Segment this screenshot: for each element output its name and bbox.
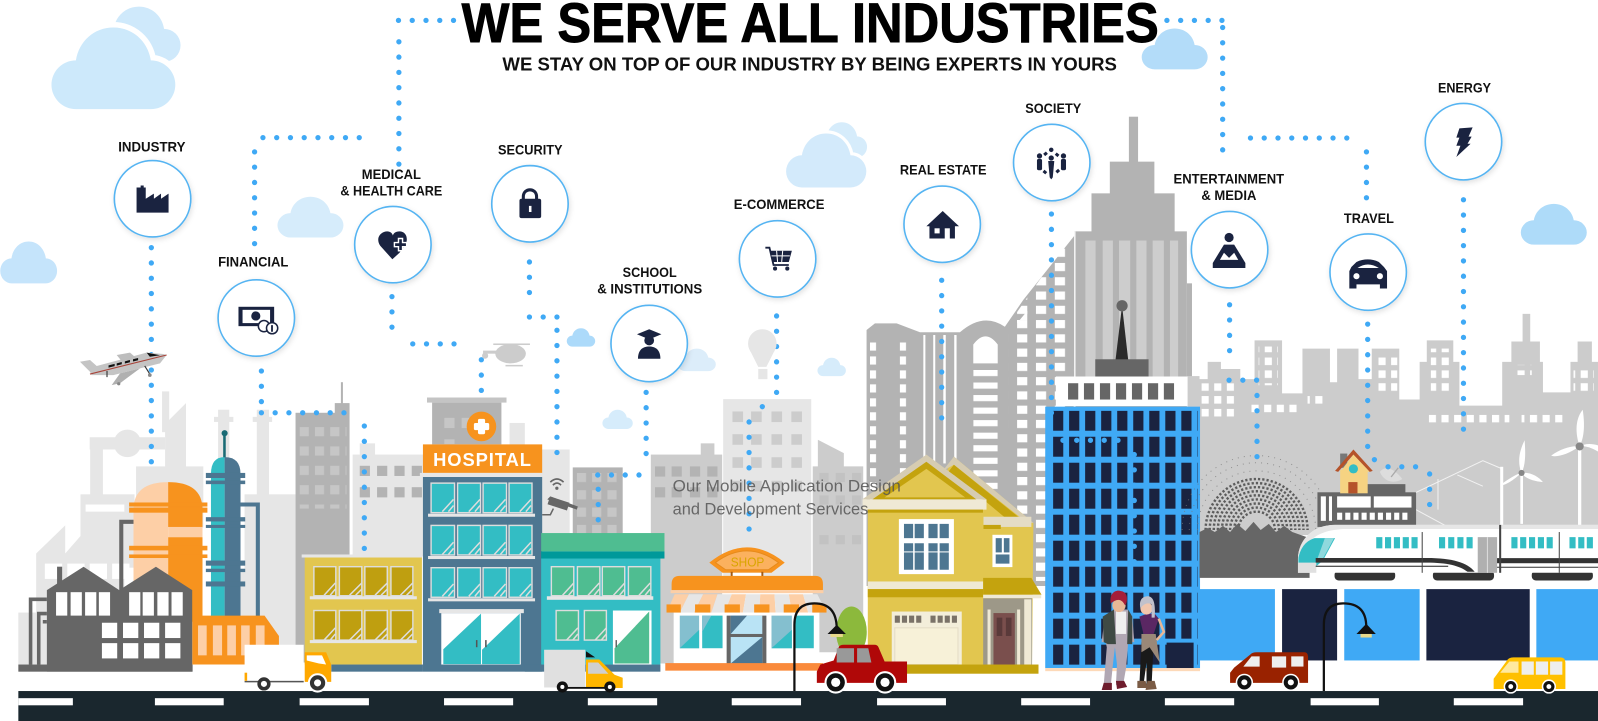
dotted connectors bbox=[151, 20, 1463, 577]
ground strip under yellow building bbox=[331, 665, 423, 672]
label: security: SECURITY bbox=[498, 142, 563, 157]
icon: padlock bbox=[519, 190, 541, 218]
elevated rail base panels bbox=[1200, 589, 1598, 660]
label: school: SCHOOL bbox=[623, 265, 677, 280]
cloud far left bbox=[0, 242, 57, 283]
panel: e-commerce node bbox=[734, 197, 825, 297]
background factory silhouette bbox=[18, 391, 296, 666]
cloud top right bbox=[1142, 29, 1208, 69]
panel: school node bbox=[597, 265, 702, 382]
road bbox=[18, 691, 1598, 721]
red car bbox=[817, 645, 907, 694]
icon: car bbox=[1349, 259, 1387, 288]
icon: graduate bbox=[637, 329, 661, 359]
hospital bbox=[420, 412, 542, 672]
panel: society node bbox=[1014, 101, 1090, 201]
icon: shopping cart bbox=[765, 248, 792, 271]
cloud centre bbox=[786, 122, 867, 188]
panel: security node bbox=[492, 142, 568, 242]
blue office tower bbox=[1045, 300, 1200, 671]
label: institutions: & INSTITUTIONS bbox=[597, 282, 702, 297]
wind turbines and overhead lines bbox=[1401, 410, 1598, 532]
panel: energy node bbox=[1425, 81, 1502, 180]
hospital sign text: HOSPITAL bbox=[433, 449, 531, 470]
overlay caption: and Development Services bbox=[673, 500, 868, 519]
panel: medical node bbox=[340, 167, 442, 283]
hot-air balloon bbox=[748, 329, 777, 379]
gold house bbox=[862, 455, 1042, 674]
icon: lightning bolt bbox=[1456, 127, 1473, 157]
label: real estate: REAL ESTATE bbox=[900, 162, 987, 177]
small cloud near security bbox=[567, 328, 595, 347]
label: society: SOCIETY bbox=[1025, 101, 1081, 116]
yellow van bbox=[1494, 657, 1565, 694]
grey building behind hospital bbox=[427, 397, 525, 445]
street lamp right bbox=[1324, 603, 1376, 691]
panel: industry node bbox=[114, 140, 191, 237]
panel: financial node bbox=[218, 255, 295, 356]
light building beside yellow block bbox=[353, 443, 424, 556]
label: financial: FINANCIAL bbox=[218, 255, 288, 270]
street lamp left bbox=[794, 603, 846, 691]
cloud near financial bbox=[277, 197, 343, 237]
small cloud below school bbox=[602, 410, 633, 429]
grey tower behind factory bbox=[296, 382, 350, 662]
icon: people group bbox=[1037, 148, 1066, 179]
cloud right bbox=[1521, 204, 1587, 245]
green bush behind red car bbox=[836, 606, 867, 657]
small cloud near balloon bbox=[817, 358, 846, 376]
shop sign text: SHOP bbox=[731, 555, 764, 570]
hospital cross badge bbox=[467, 412, 496, 441]
man and woman bbox=[1102, 591, 1164, 690]
small building with house on roof bbox=[1317, 449, 1416, 527]
high-speed train bbox=[1298, 525, 1598, 580]
concert crowd and sound dome bbox=[1182, 456, 1331, 578]
label: energy: ENERGY bbox=[1438, 81, 1491, 96]
overlay caption bbox=[673, 476, 901, 519]
mid city buildings behind shop bbox=[651, 399, 863, 664]
red van bbox=[1230, 652, 1308, 691]
panel: real estate node bbox=[900, 162, 987, 262]
figure: woman bbox=[1137, 596, 1164, 690]
label: industry: INDUSTRY bbox=[118, 140, 186, 155]
city skyline right bbox=[1200, 314, 1598, 535]
teal shop building bbox=[525, 533, 664, 672]
tall grey towers behind house bbox=[867, 117, 1200, 587]
yellow block building bbox=[302, 554, 422, 665]
icon: factory bbox=[137, 185, 169, 213]
subtitle: WE STAY ON TOP OF OUR INDUSTRY BY BEING EXPERTS IN YOURS bbox=[502, 53, 1117, 74]
label: travel: TRAVEL bbox=[1344, 211, 1394, 226]
grey and gold delivery truck bbox=[544, 650, 623, 693]
small cloud behind school bbox=[678, 349, 716, 371]
satellite dish bbox=[1380, 468, 1402, 482]
icon: heart with plus bbox=[378, 231, 407, 259]
icon: seated person with headphones bbox=[1213, 233, 1245, 268]
wifi icon bbox=[550, 479, 564, 489]
industrial plant bbox=[18, 430, 279, 672]
overlay caption: Our Mobile Application Design bbox=[673, 476, 901, 495]
cloud top left bbox=[51, 7, 181, 109]
helicopter bbox=[482, 343, 530, 366]
label: e-commerce: E-COMMERCE bbox=[734, 197, 825, 212]
panel: travel node bbox=[1330, 211, 1406, 310]
shop bbox=[665, 547, 827, 671]
security camera bbox=[542, 496, 578, 515]
label: entertainment: ENTERTAINMENT bbox=[1174, 171, 1285, 186]
white delivery truck bbox=[245, 645, 331, 693]
panel: entertainment node bbox=[1174, 171, 1285, 288]
icon: money bbox=[238, 307, 278, 334]
label: medical: MEDICAL bbox=[362, 167, 421, 182]
light building and grey building behind teal shop bbox=[541, 449, 623, 535]
icon: house bbox=[926, 211, 959, 238]
label: media: & MEDIA bbox=[1201, 188, 1257, 203]
figure: man bbox=[1102, 591, 1134, 690]
label: health care: & HEALTH CARE bbox=[340, 184, 442, 199]
airplane bbox=[80, 353, 167, 385]
